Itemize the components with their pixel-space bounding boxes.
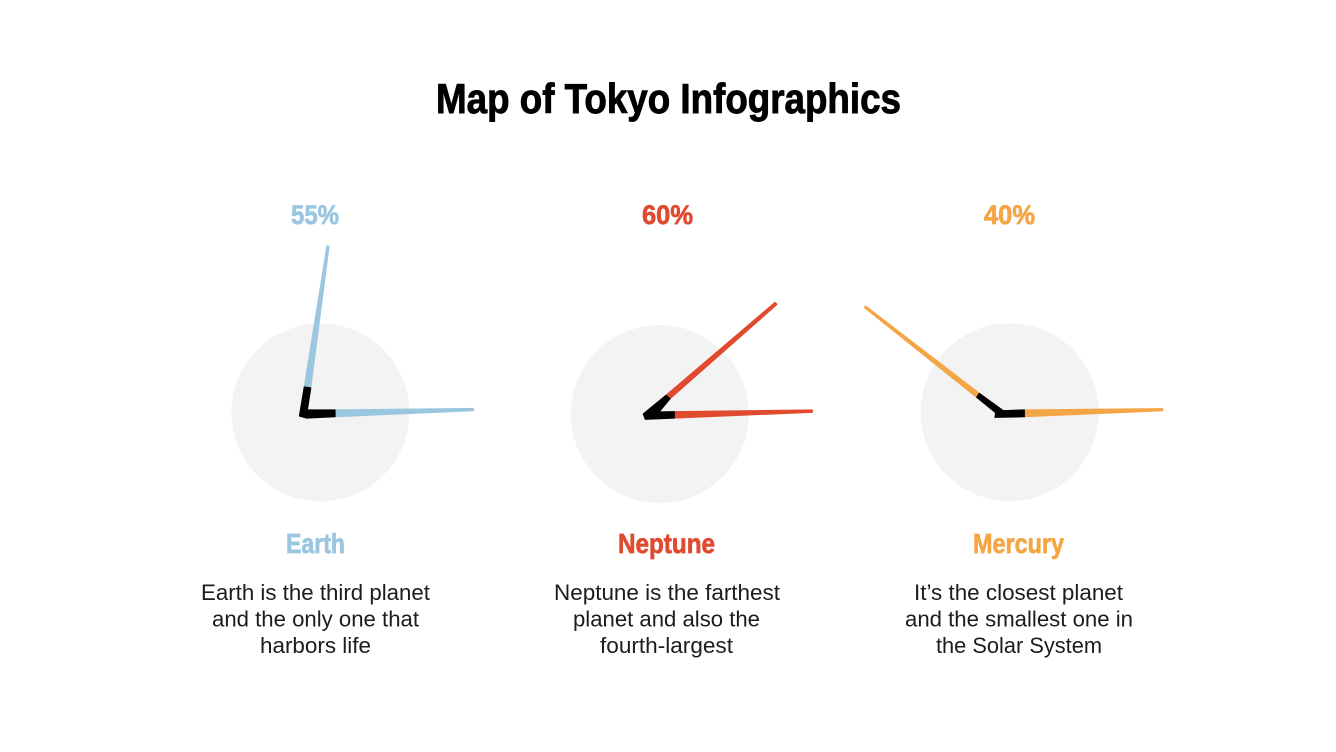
Earth description: and the only one that [212, 606, 419, 632]
Neptune gauge [571, 302, 812, 503]
Neptune description: planet and also the [573, 606, 760, 632]
Neptune description: Neptune is the farthest [554, 580, 780, 605]
Earth description: harbors life [260, 633, 371, 658]
Mercury percentage: 40% [984, 200, 1035, 230]
Mercury heading: Mercury [973, 528, 1064, 559]
Neptune percentage: 60% [642, 200, 693, 230]
Earth percentage: 55% [291, 200, 339, 230]
panel: Earth [201, 200, 473, 658]
Neptune heading: Neptune [618, 528, 715, 559]
Earth heading: Earth [286, 528, 345, 559]
Mercury description [905, 580, 1133, 658]
Mercury description: It’s the closest planet [914, 580, 1123, 605]
Earth gauge [231, 246, 473, 502]
Earth description: Earth is the third planet [201, 580, 430, 605]
title: Map of Tokyo Infographics [436, 75, 901, 122]
panel: Mercury [864, 200, 1163, 658]
panel: Neptune [554, 200, 812, 658]
Neptune description [554, 580, 780, 658]
Neptune description: fourth-largest [600, 633, 733, 658]
Earth description [201, 580, 430, 658]
Mercury description: the Solar System [936, 633, 1102, 658]
Mercury description: and the smallest one in [905, 606, 1133, 632]
Mercury gauge [864, 306, 1163, 501]
